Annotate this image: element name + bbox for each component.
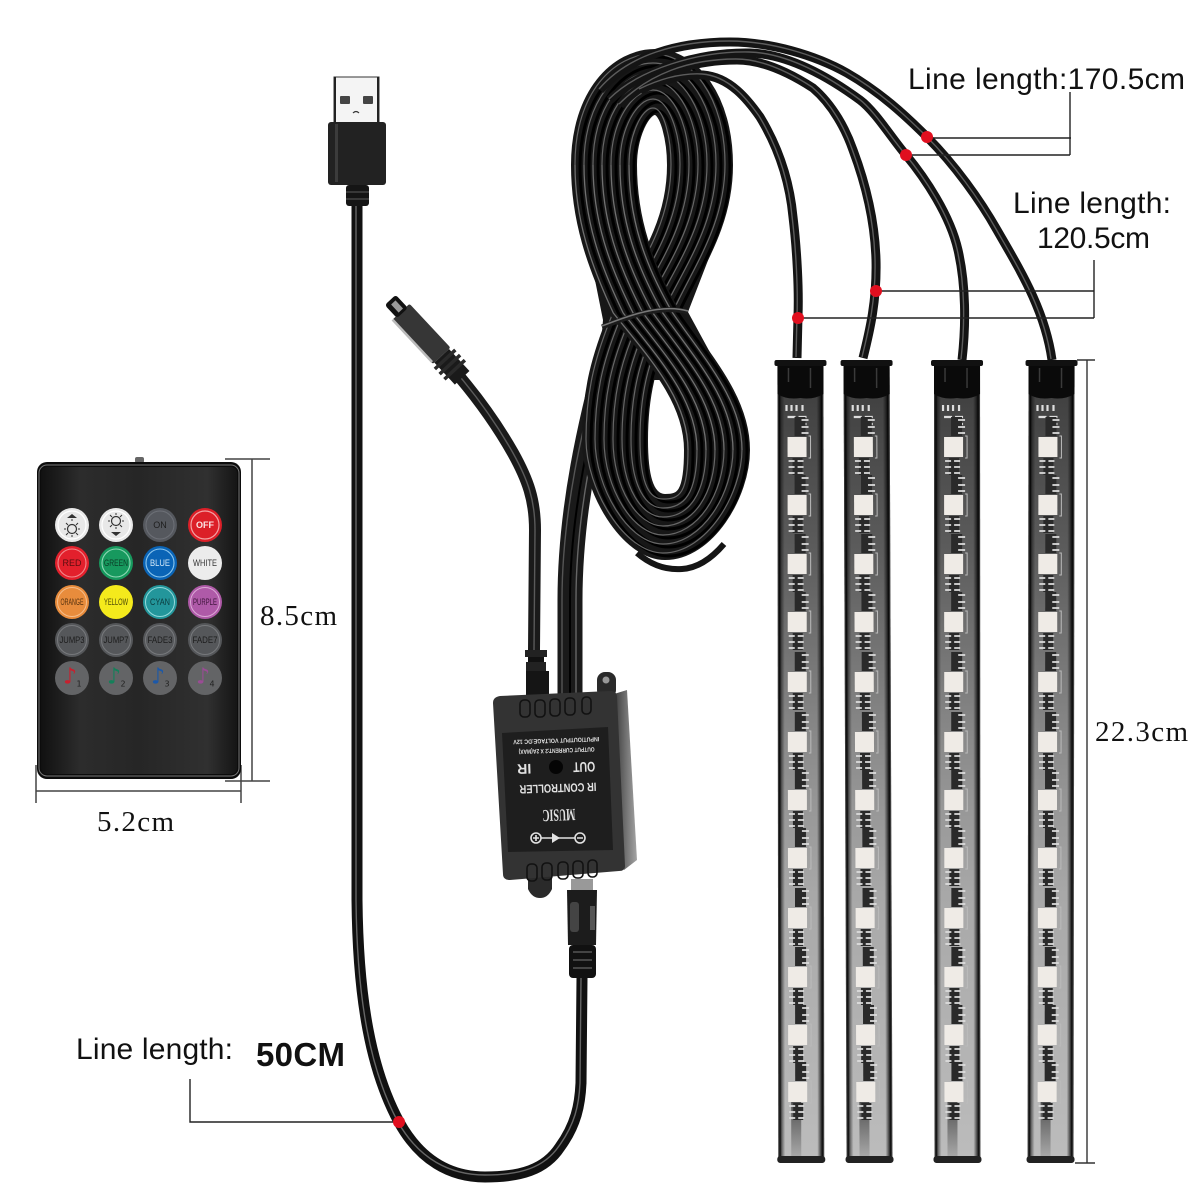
remote buttons row 3: secondary colours: YELLOW <box>104 597 128 607</box>
controller upside-down label text: OUTPUT CURRENT:2 X 2A(MAX) <box>519 745 595 755</box>
panel: remote control <box>37 457 241 779</box>
controller upside-down label text: IR CONTROLLER <box>519 780 597 796</box>
remote buttons row 1: brightness and power <box>55 508 222 542</box>
remote buttons row 4: effects: JUMP3 <box>60 635 84 645</box>
remote height label: 8.5cm <box>260 600 337 632</box>
remote buttons row 1: brightness and power: ON <box>153 520 167 530</box>
callout: 50CM line length: 50CM <box>256 1036 345 1073</box>
controller upside-down label text: OUT <box>573 759 595 775</box>
callout: 120.5cm line length <box>1013 187 1171 255</box>
leader lines for line length callouts <box>190 92 1094 1122</box>
controller sensor <box>549 760 563 774</box>
remote buttons row 2: primary colours: GREEN <box>104 558 128 568</box>
controller upside-down label text <box>512 735 602 826</box>
remote buttons row 3: secondary colours: PURPLE <box>193 597 217 607</box>
controller label panel <box>502 727 613 852</box>
remote buttons row 5: music modes: 4 <box>209 680 215 688</box>
callout: 120.5cm line length: 120.5cm <box>1037 222 1150 255</box>
callout: 170.5cm line length: Line length:170.5cm <box>908 63 1185 96</box>
remote buttons row 2: primary colours: WHITE <box>193 558 217 568</box>
controller side face <box>614 690 637 870</box>
strip length label: 22.3cm <box>1095 716 1188 748</box>
coiled cable bundle <box>562 54 747 695</box>
remote buttons row 1: brightness and power: OFF <box>196 520 214 530</box>
controller front face <box>493 691 625 880</box>
DC jack connector <box>567 879 597 978</box>
cable strain relief <box>525 650 549 695</box>
cable tie <box>602 309 688 327</box>
mounting tab bottom <box>528 875 552 898</box>
LED strip 1 <box>774 360 827 1163</box>
remote buttons row 2: primary colours: RED <box>62 558 82 568</box>
cable coil figure eight <box>575 54 747 556</box>
callout: 50CM line length <box>76 1033 345 1073</box>
vent notches <box>520 697 597 881</box>
USB cable to DC jack <box>356 205 582 1177</box>
remote buttons row 5: music modes: 2 <box>120 680 126 688</box>
remote buttons row 5: music modes: ♪ <box>151 664 165 690</box>
callout: 120.5cm line length: Line length: <box>1013 187 1171 220</box>
remote buttons row 5: music modes <box>55 661 222 695</box>
remote body <box>37 457 241 779</box>
remote control dimension lines <box>36 459 270 803</box>
remote buttons row 4: effects: JUMP7 <box>104 635 128 645</box>
USB plug <box>328 77 386 206</box>
remote buttons row 4: effects: FADE7 <box>192 635 218 645</box>
callout: 50CM line length: Line length: <box>76 1033 233 1066</box>
remote buttons row 2: primary colours: BLUE <box>150 558 170 568</box>
remote buttons row 2: primary colours <box>55 546 222 580</box>
polarity symbol <box>531 833 585 843</box>
remote buttons row 5: music modes: 3 <box>164 680 170 688</box>
controller upside-down label text: INPUT/OUTPUT VOLTAGE:DC 12V <box>512 735 599 745</box>
remote buttons row 3: secondary colours: CYAN <box>150 597 170 607</box>
micro connector with cable <box>380 291 549 695</box>
red marker dots <box>393 131 933 1128</box>
remote buttons row 5: music modes: ♪ <box>63 664 77 690</box>
remote buttons row 4: effects <box>55 623 222 657</box>
mounting tab top <box>597 672 616 698</box>
controller upside-down label text: IR <box>517 761 532 777</box>
remote buttons row 5: music modes: ♪ <box>107 664 121 690</box>
LED strip 4 <box>1025 360 1078 1163</box>
stray cable loop <box>637 544 724 569</box>
IR controller box <box>493 672 637 898</box>
remote buttons row 5: music modes: ♪ <box>196 664 210 690</box>
LED strip 3 <box>931 360 983 1163</box>
remote width label: 5.2cm <box>97 806 174 838</box>
remote buttons row 3: secondary colours: ORANGE <box>60 597 84 607</box>
remote buttons row 4: effects: FADE3 <box>148 635 172 645</box>
remote buttons row 5: music modes: 1 <box>76 680 82 688</box>
strip length dimension line <box>1075 360 1095 1163</box>
flat cable to controller <box>562 340 616 695</box>
controller upside-down label text: MUSIC <box>542 805 576 825</box>
wires from coil to LED strips <box>599 41 1052 360</box>
remote buttons row 3: secondary colours <box>55 585 222 619</box>
LED strip 2 <box>841 360 896 1163</box>
